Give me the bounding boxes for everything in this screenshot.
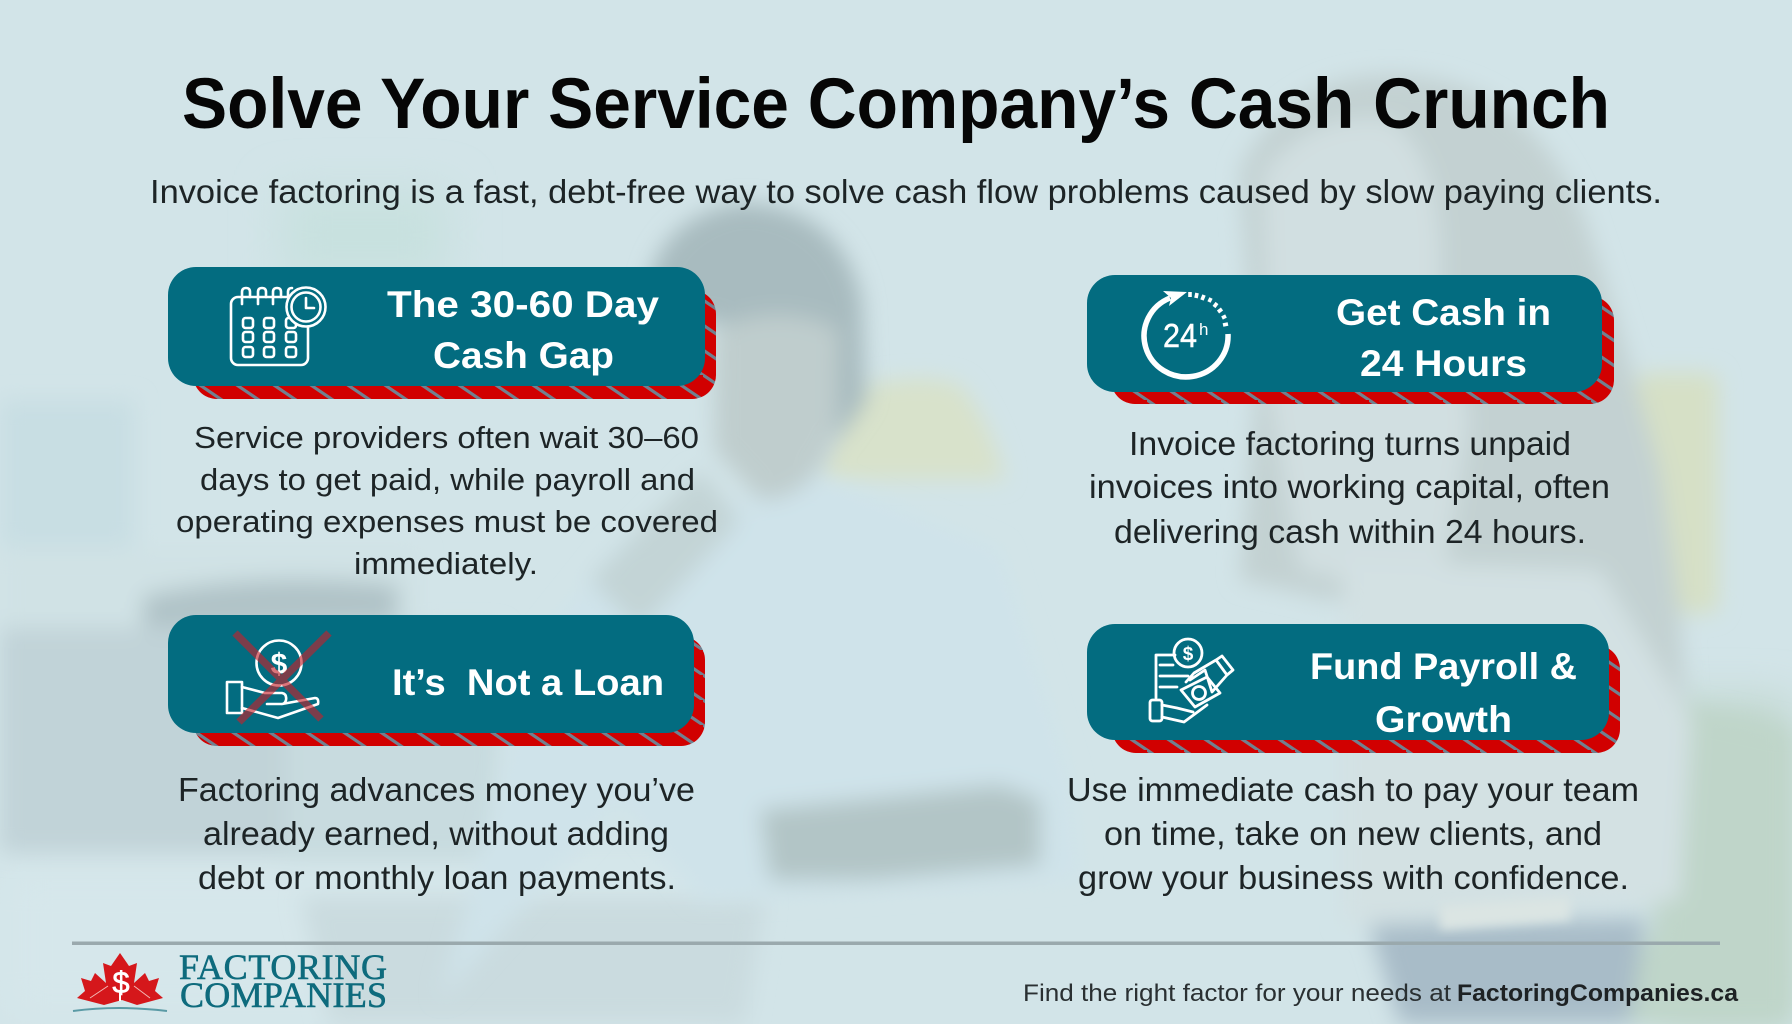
text: fund payroll description	[1067, 771, 1639, 896]
icon: maple leaf with dollar sign	[73, 953, 167, 1011]
footer call to action	[1023, 980, 1739, 1007]
panel: the 30-60 day cash gap	[168, 267, 718, 581]
text: fund payroll description: Use immediate cash to pay your team	[1067, 771, 1639, 808]
text: fund payroll description: grow your business with confidence.	[1078, 859, 1629, 896]
heading: fund payroll and growth: Growth	[1375, 699, 1512, 740]
footer call to action: Find the right factor for your needs at	[1023, 980, 1451, 1007]
icon: calendar with clock	[231, 288, 326, 365]
heading: the 30-60 day cash gap: Cash Gap	[433, 335, 614, 376]
heading: the 30-60 day cash gap	[387, 284, 659, 376]
heading: get cash in 24 hours	[1336, 292, 1551, 384]
text: cash gap description: immediately.	[354, 546, 538, 581]
text: fund payroll description: on time, take on new clients, and	[1104, 815, 1602, 852]
text: 24 hours description: Invoice factoring turns unpaid	[1129, 425, 1571, 462]
text: cash gap description: Service providers often wait 30–60	[194, 420, 699, 455]
icon: 24 hour clock: h	[1199, 320, 1208, 339]
text: 24 hours description	[1089, 425, 1610, 550]
logo: factoring companies	[73, 947, 387, 1015]
text: cash gap description: operating expenses must be covered	[176, 504, 718, 539]
logo wordmark: FACTORING	[179, 947, 387, 987]
icon: hand with crossed-out coin	[227, 633, 329, 722]
heading: get cash in 24 hours: 24 Hours	[1360, 343, 1527, 384]
logo wordmark	[179, 947, 387, 1015]
panel: fund payroll and growth	[1067, 624, 1639, 896]
icon: hand with crossed-out coin: $	[271, 648, 288, 681]
heading: it's not a loan: It’s Not a Loan	[392, 662, 664, 703]
icon: 24 hour clock: 24	[1163, 317, 1197, 354]
title: Solve Your Service Company’s Cash Crunch	[182, 65, 1610, 144]
icon: hands exchanging money	[1150, 639, 1233, 722]
logo wordmark: COMPANIES	[180, 975, 387, 1015]
text: not a loan description: already earned, without adding	[203, 815, 669, 852]
heading: get cash in 24 hours: Get Cash in	[1336, 292, 1551, 333]
heading: fund payroll and growth	[1310, 646, 1577, 740]
heading: fund payroll and growth: Fund Payroll &	[1310, 646, 1577, 687]
banner: not a loan	[168, 615, 705, 746]
icon: maple leaf with dollar sign: $	[112, 965, 130, 1000]
banner: cash gap	[168, 267, 716, 399]
footer call to action: FactoringCompanies.ca	[1457, 980, 1739, 1007]
text: 24 hours description: invoices into working capital, often	[1089, 468, 1610, 505]
heading: the 30-60 day cash gap: The 30-60 Day	[387, 284, 659, 325]
text: cash gap description: days to get paid, while payroll and	[200, 462, 695, 497]
icon: 24 hour clock	[1144, 291, 1228, 377]
banner: fund payroll	[1087, 624, 1620, 753]
subtitle: Invoice factoring is a fast, debt-free way to solve cash flow problems caused by slow paying clients.	[150, 173, 1662, 210]
icon: hands exchanging money: $	[1183, 644, 1194, 665]
text: not a loan description: Factoring advances money you’ve	[178, 771, 695, 808]
panel: get cash in 24 hours	[1087, 275, 1614, 550]
text: cash gap description	[176, 420, 718, 581]
text: not a loan description: debt or monthly loan payments.	[198, 859, 676, 896]
text: not a loan description	[178, 771, 695, 896]
banner: 24 hours	[1087, 275, 1614, 404]
text: 24 hours description: delivering cash within 24 hours.	[1114, 513, 1586, 550]
panel: it's not a loan	[168, 615, 705, 896]
